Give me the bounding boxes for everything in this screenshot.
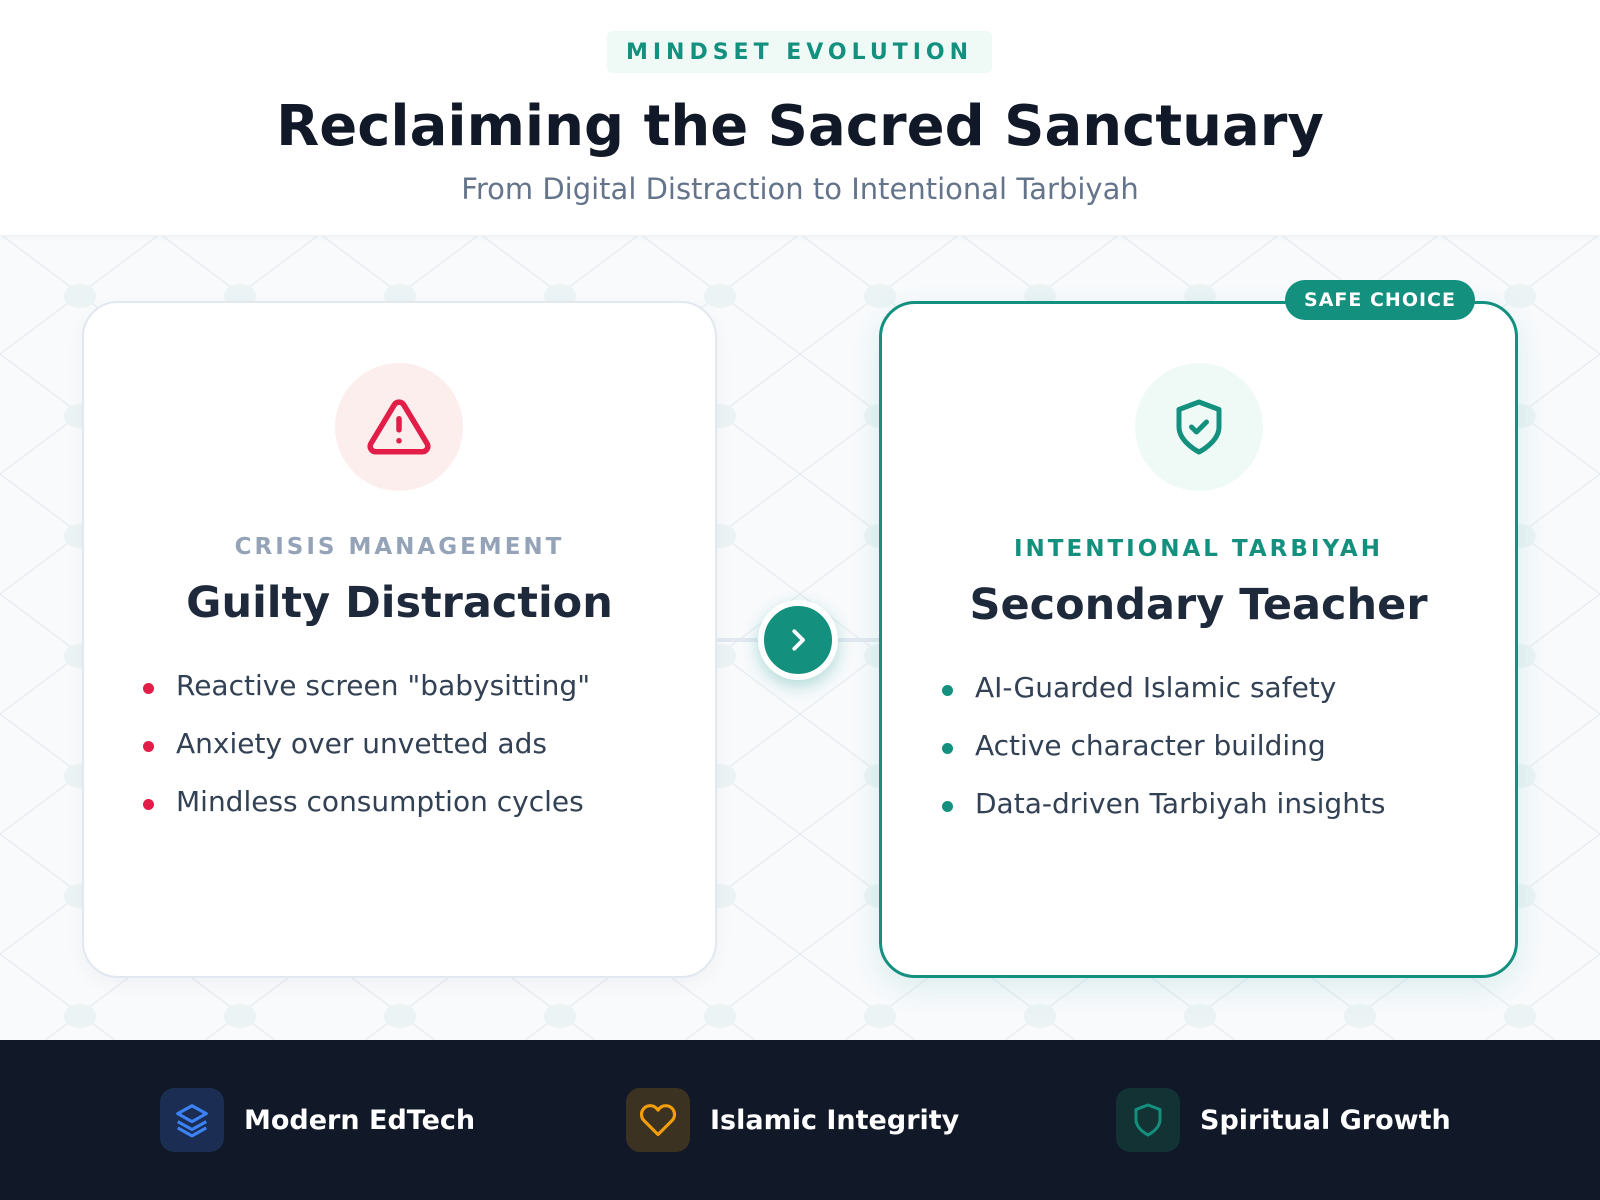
badge: safe choice: SAFE CHOICE bbox=[1304, 289, 1456, 311]
footer item: spiritual growth bbox=[1116, 1088, 1451, 1152]
background pattern bbox=[0, 236, 1600, 1040]
bullet list bbox=[942, 671, 1386, 820]
bullet list: Reactive screen "babysitting" bbox=[176, 669, 590, 702]
icon: shield bbox=[1135, 363, 1263, 491]
footer item: islamic integrity: Islamic Integrity bbox=[710, 1104, 959, 1136]
bullet list: AI-Guarded Islamic safety bbox=[975, 671, 1336, 704]
panel: crisis management bbox=[82, 301, 717, 978]
footer item: islamic integrity bbox=[626, 1088, 959, 1152]
connector line bbox=[717, 638, 879, 642]
icon: warning bbox=[335, 363, 463, 491]
bullet list: Anxiety over unvetted ads bbox=[176, 727, 547, 760]
footer item: spiritual growth: Spiritual Growth bbox=[1200, 1104, 1451, 1136]
subtitle: From Digital Distraction to Intentional Tarbiyah bbox=[461, 172, 1139, 206]
eyebrow pill bbox=[607, 31, 992, 73]
badge: safe choice bbox=[1285, 280, 1475, 320]
header bbox=[0, 0, 1600, 236]
footer item: modern edtech bbox=[160, 1088, 475, 1152]
bullet list: Data-driven Tarbiyah insights bbox=[975, 787, 1386, 820]
label: CRISIS MANAGEMENT bbox=[235, 534, 564, 560]
label: INTENTIONAL TARBIYAH bbox=[1014, 536, 1383, 562]
bullet list: Mindless consumption cycles bbox=[176, 785, 584, 818]
footer item: modern edtech: Modern EdTech bbox=[244, 1104, 475, 1136]
title: Reclaiming the Sacred Sanctuary bbox=[276, 94, 1324, 159]
panel: intentional tarbiyah bbox=[879, 301, 1518, 978]
footer bbox=[0, 1040, 1600, 1200]
eyebrow pill: MINDSET EVOLUTION bbox=[626, 40, 973, 65]
bullet list: Active character building bbox=[975, 729, 1326, 762]
heading: Secondary Teacher bbox=[969, 580, 1428, 630]
arrow bbox=[758, 600, 838, 680]
heading: Guilty Distraction bbox=[186, 578, 613, 628]
bullet list bbox=[143, 669, 590, 818]
